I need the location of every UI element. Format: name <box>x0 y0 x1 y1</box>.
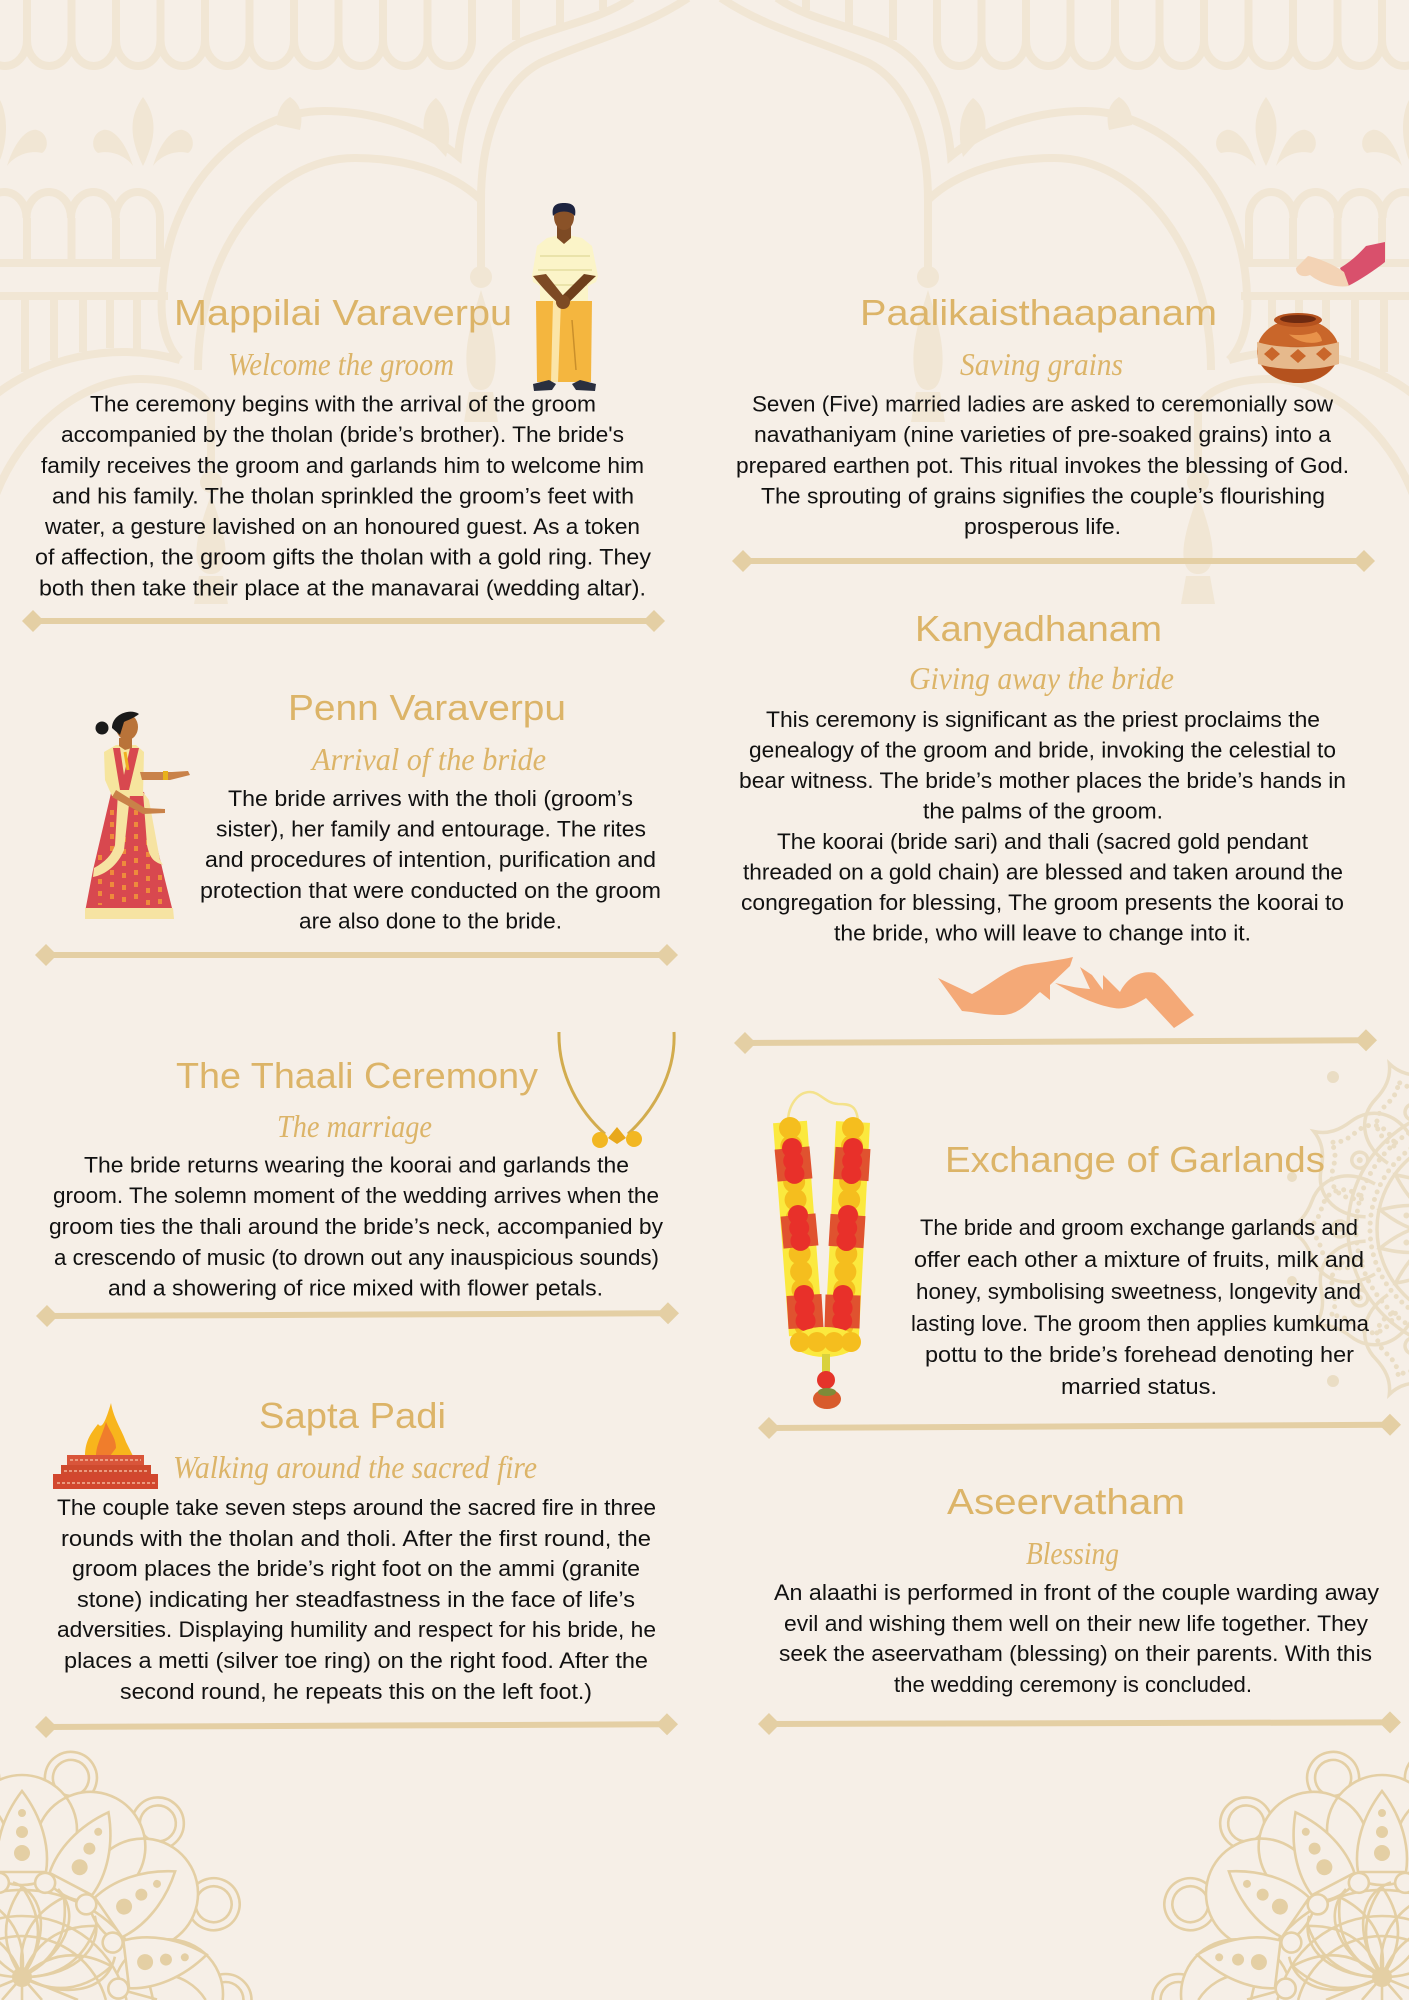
icon: hand sprinkling grains <box>1296 242 1385 286</box>
body text: and a showering of rice mixed with flower petals. <box>108 1276 603 1300</box>
subheading: Blessing <box>1026 1535 1119 1571</box>
body text: the bride, who will leave to change into it. <box>834 920 1251 946</box>
icon: bride <box>85 712 190 919</box>
body text: second round, he repeats this on the left foot.) <box>120 1679 592 1704</box>
panel: Sapta Padi <box>35 1395 678 1738</box>
body text: of affection, the groom gifts the tholan with a gold ring. They <box>35 544 651 570</box>
body text: evil and wishing them well on their new life together. They <box>784 1611 1368 1636</box>
body text: The ceremony begins with the arrival of the groom <box>90 392 596 416</box>
decorative mandala: bottom left <box>0 1746 252 2000</box>
body text: rounds with the tholan and tholi. After the first round, the <box>61 1526 651 1551</box>
body text: family receives the groom and garlands him to welcome him <box>41 453 644 478</box>
body text: seek the aseervatham (blessing) on their parents. With this <box>779 1641 1372 1666</box>
body text: a crescendo of music (to drown out any inauspicious sounds) <box>54 1245 659 1270</box>
heading: Mappilai Varaverpu <box>174 292 512 333</box>
body text: navathaniyam (nine varieties of pre-soaked grains) into a <box>754 422 1332 447</box>
body text <box>49 1152 663 1300</box>
icon: earthen pot <box>1257 313 1339 383</box>
divider <box>22 610 665 632</box>
body text: threaded on a gold chain) are blessed and taken around the <box>743 860 1343 884</box>
body text: bear witness. The bride’s mother places the bride’s hands in <box>739 768 1346 793</box>
icon: sacred fire <box>53 1403 158 1489</box>
decorative mandala: right edge <box>1286 1040 1409 1418</box>
body text: The koorai (bride sari) and thali (sacred gold pendant <box>777 829 1308 854</box>
body text <box>911 1215 1370 1399</box>
body text: places a metti (silver toe ring) on the right food. After the <box>64 1648 648 1673</box>
body text: offer each other a mixture of fruits, milk and <box>914 1247 1364 1272</box>
subheading: Saving grains <box>960 346 1123 382</box>
body text: congregation for blessing, The groom presents the koorai to <box>741 890 1344 915</box>
body text: pottu to the bride’s forehead denoting her <box>925 1342 1354 1367</box>
panel: The Thaali Ceremony <box>36 1055 679 1327</box>
panel: Mappilai Varaverpu <box>22 292 665 632</box>
body text <box>200 786 661 934</box>
body text: groom places the bride’s right foot on the ammi (granite <box>72 1556 640 1581</box>
body text: prepared earthen pot. This ritual invokes the blessing of God. <box>736 453 1349 478</box>
icon: groom <box>532 203 598 391</box>
subheading: Giving away the bride <box>909 660 1174 696</box>
body text: honey, symbolising sweetness, longevity and <box>916 1279 1361 1304</box>
icon: thaali necklace <box>559 1032 674 1148</box>
divider <box>734 1029 1377 1054</box>
body text: groom. The solemn moment of the wedding arrives when the <box>53 1183 659 1208</box>
body text: both then take their place at the manavarai (wedding altar). <box>39 576 646 600</box>
body text: The bride returns wearing the koorai and garlands the <box>84 1152 629 1178</box>
body text: and procedures of intention, purification and <box>205 847 656 872</box>
panel: Exchange of Garlands <box>758 1139 1401 1439</box>
heading: The Thaali Ceremony <box>176 1055 538 1096</box>
divider <box>36 1302 679 1327</box>
background: temple arches and domes <box>0 0 1409 604</box>
body text: the palms of the groom. <box>923 798 1163 824</box>
body text: genealogy of the groom and bride, invoking the celestial to <box>749 738 1336 762</box>
heading: Exchange of Garlands <box>945 1139 1325 1180</box>
body text: adversities. Displaying humility and respect for his bride, he <box>57 1617 656 1642</box>
panel: Penn Varaverpu <box>35 687 678 966</box>
body text: An alaathi is performed in front of the couple warding away <box>774 1580 1379 1605</box>
heading: Sapta Padi <box>259 1395 446 1436</box>
divider <box>758 1711 1401 1735</box>
body text: The sprouting of grains signifies the couple’s flourishing <box>761 484 1325 508</box>
subheading: Walking around the sacred fire <box>173 1449 537 1485</box>
body text: lasting love. The groom then applies kumkuma <box>911 1311 1370 1336</box>
body text <box>739 707 1346 946</box>
subheading: Welcome the groom <box>228 346 454 382</box>
body text: stone) indicating her steadfastness in the face of life’s <box>77 1587 635 1612</box>
divider <box>35 1713 678 1738</box>
icon: joined hands <box>938 957 1194 1028</box>
body text: The bride arrives with the tholi (groom’s <box>228 786 633 811</box>
panel: Aseervatham <box>758 1481 1401 1735</box>
subheading: Arrival of the bride <box>310 741 546 777</box>
heading: Penn Varaverpu <box>288 687 566 728</box>
body text: are also done to the bride. <box>299 908 562 934</box>
body text: sister), her family and entourage. The rites <box>216 816 646 842</box>
body text: The couple take seven steps around the sacred fire in three <box>57 1495 656 1520</box>
heading: Kanyadhanam <box>915 608 1162 649</box>
body text: The bride and groom exchange garlands and <box>920 1215 1358 1240</box>
body text: protection that were conducted on the groom <box>200 878 661 903</box>
divider <box>732 550 1375 572</box>
body text <box>736 392 1349 539</box>
divider <box>35 944 678 966</box>
body text: the wedding ceremony is concluded. <box>894 1672 1252 1697</box>
heading: Aseervatham <box>947 1481 1185 1522</box>
body text <box>35 392 651 600</box>
body text: prosperous life. <box>964 514 1121 539</box>
decorative mandala: bottom right <box>1152 1746 1409 2000</box>
panel: Kanyadhanam <box>734 608 1377 1054</box>
body text: water, a gesture lavished on an honoured guest. As a token <box>44 514 640 539</box>
body text <box>57 1495 656 1704</box>
body text: Seven (Five) married ladies are asked to ceremonially sow <box>752 392 1333 416</box>
divider <box>758 1414 1401 1439</box>
body text <box>774 1580 1379 1697</box>
panel: Paalikaisthaapanam <box>732 292 1375 572</box>
icon: flower garland <box>788 1092 858 1409</box>
heading: Paalikaisthaapanam <box>860 292 1217 333</box>
body text: married status. <box>1061 1374 1217 1399</box>
body text: accompanied by the tholan (bride’s brother). The bride's <box>61 422 624 447</box>
subheading: The marriage <box>277 1108 432 1144</box>
body text: This ceremony is significant as the priest proclaims the <box>766 707 1320 732</box>
body text: and his family. The tholan sprinkled the groom’s feet with <box>52 484 634 508</box>
body text: groom ties the thali around the bride’s neck, accompanied by <box>49 1214 663 1239</box>
